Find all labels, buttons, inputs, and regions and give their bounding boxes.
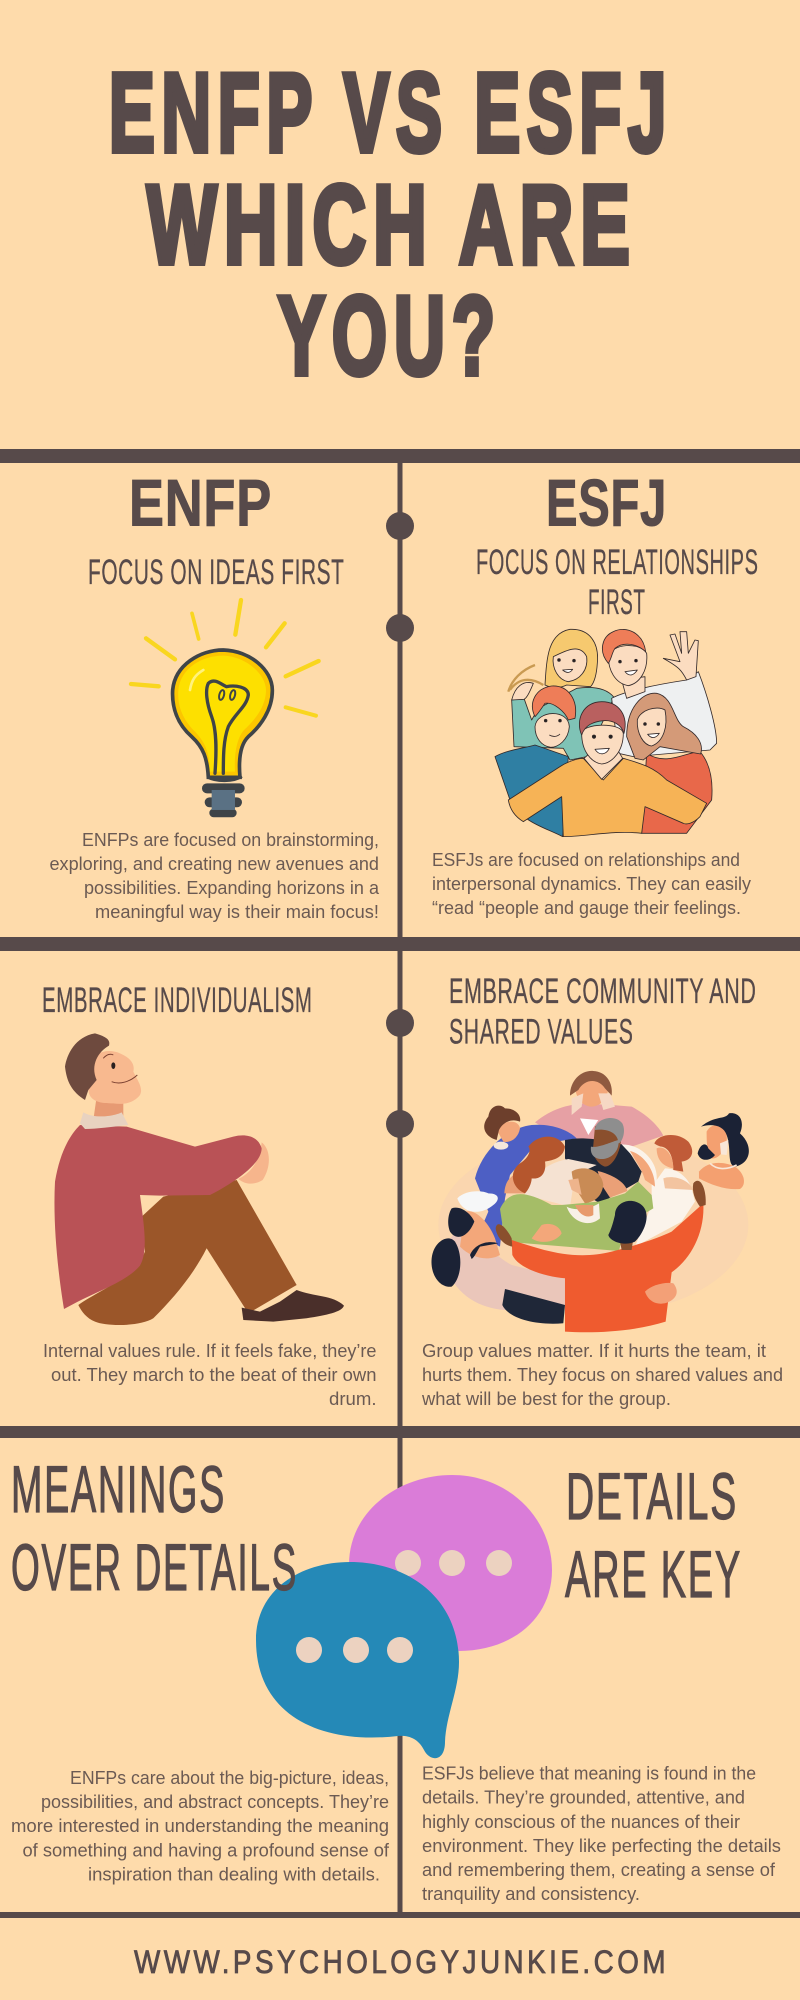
body: ENFP ideas <box>50 829 380 922</box>
heading: ESFJ: ESFJ <box>546 466 667 540</box>
body: ESFJ details: ESFJs believe that meaning is found in the <box>422 1762 756 1784</box>
body: ENFP ideas: exploring, and creating new avenues and <box>50 853 379 874</box>
body: ESFJ details: environment. They like perfecting the details <box>422 1835 781 1856</box>
heading: embrace community and shared values <box>449 972 756 1052</box>
body: ESFJ community: hurts them. They focus on shared values and <box>422 1364 783 1385</box>
person: woman with red ponytail <box>504 1137 627 1207</box>
body: ESFJ relationships: ESFJs are focused on relationships and <box>432 849 740 870</box>
heading: meanings over details: MEANINGS <box>11 1452 226 1526</box>
body: ESFJ details <box>422 1762 781 1904</box>
person: waving man <box>602 629 717 757</box>
illustration: group of five friends <box>495 629 717 837</box>
heading: focus on relationships first <box>476 543 758 622</box>
icon: light bulb <box>131 600 319 817</box>
body: ESFJ details: and remembering them, creating a sense of <box>422 1859 776 1880</box>
body: ENFP meaning: possibilities, and abstract concepts. They’re <box>41 1791 389 1812</box>
title: YOU? <box>278 274 502 398</box>
title <box>109 51 673 398</box>
illustration: man sitting looking up <box>54 1033 344 1325</box>
heading: details are key <box>565 1459 742 1611</box>
layout dividers <box>0 449 800 1918</box>
body: ESFJ details: highly conscious of the nuances of their <box>422 1811 740 1832</box>
body: ESFJ details: tranquility and consistency. <box>422 1883 640 1904</box>
heading: embrace community and shared values: SHARED VALUES <box>449 1012 634 1052</box>
trousers <box>78 1180 297 1325</box>
body: ESFJ relationships: interpersonal dynamics. They can easily <box>432 873 752 894</box>
person: white top, red bob <box>622 1135 695 1247</box>
body: ENFP meaning: inspiration than dealing with details. <box>88 1864 380 1884</box>
hand <box>238 1142 269 1184</box>
body: ENFP ideas: meaningful way is their main focus! <box>95 901 379 922</box>
person: woman with long brown hair <box>627 693 712 833</box>
person: centre man in yellow <box>508 702 707 837</box>
body: ENFP meaning: of something and having a profound sense of <box>22 1840 390 1860</box>
body: ENFP meaning: more interested in understanding the meaning <box>11 1815 389 1836</box>
person: woman with black curly hair <box>698 1113 749 1189</box>
body: ESFJ community <box>421 1340 783 1409</box>
heading: embrace individualism: EMBRACE INDIVIDUALISM <box>42 981 312 1020</box>
body: ENFP ideas: ENFPs are focused on brainstorming, <box>82 829 379 850</box>
body: ESFJ community: Group values matter. If it hurts the team, it <box>422 1340 766 1361</box>
person: man in orange-red from behind <box>496 1181 706 1332</box>
body: ESFJ relationships: “read “people and gauge their feelings. <box>432 897 741 918</box>
heading: focus on relationships first: FIRST <box>588 583 646 622</box>
person: boy in blue jumper <box>495 686 576 837</box>
head <box>88 1051 141 1104</box>
body: ENFP individualism: out. They march to the beat of their own <box>51 1364 376 1385</box>
person: blue top woman <box>475 1106 577 1247</box>
icon: pink speech bubble <box>349 1475 552 1651</box>
heading: meanings over details <box>11 1452 298 1604</box>
sweater <box>54 1125 262 1309</box>
body: ESFJ details: details. They’re grounded, attentive, and <box>422 1786 745 1808</box>
person: pink top woman <box>535 1071 663 1147</box>
icon: blue speech bubble <box>256 1562 459 1758</box>
person: blonde woman <box>508 629 614 760</box>
person: man in green <box>500 1168 653 1251</box>
body: ENFP individualism <box>43 1340 376 1409</box>
body: ENFP ideas: possibilities. Expanding horizons in a <box>84 877 380 898</box>
heading: ENFP: ENFP <box>129 466 272 540</box>
collar <box>80 1112 128 1129</box>
heading: meanings over details: OVER DETAILS <box>11 1530 298 1604</box>
illustration: group hug circle <box>431 1071 749 1332</box>
shoe <box>242 1290 344 1322</box>
neck <box>93 1097 123 1120</box>
body: ENFP individualism: Internal values rule. If it feels fake, they’re <box>43 1340 376 1361</box>
heading: focus on ideas first: FOCUS ON IDEAS FIRST <box>88 553 344 592</box>
hair <box>65 1033 109 1100</box>
person: white cap, dark hair, crouching back <box>431 1191 565 1324</box>
body: ESFJ relationships <box>432 849 752 918</box>
body: ENFP individualism: drum. <box>329 1388 376 1409</box>
body: ENFP meaning: ENFPs care about the big-picture, ideas, <box>70 1767 389 1788</box>
body: ESFJ community: what will be best for the group. <box>421 1388 671 1409</box>
pale backdrop <box>438 1135 748 1315</box>
person: older man in black <box>565 1118 642 1203</box>
website footer: WWW.PSYCHOLOGYJUNKIE.COM <box>134 1944 669 1980</box>
body: ENFP meaning <box>11 1767 390 1884</box>
